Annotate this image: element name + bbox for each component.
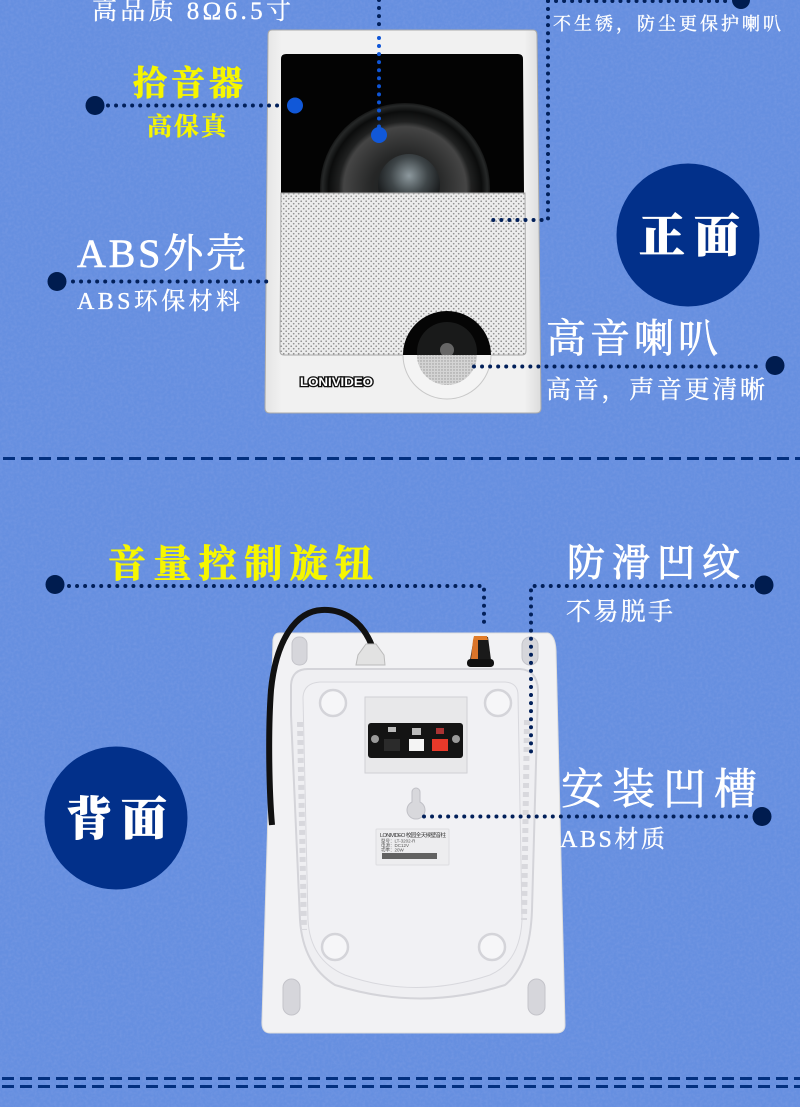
callout: ABS shell bbox=[48, 231, 270, 315]
callout: volume knob: 音量控制旋钮 bbox=[108, 544, 373, 586]
speaker black window bbox=[281, 54, 524, 193]
callout: tweeter: 高音喇叭 bbox=[546, 316, 718, 361]
callout: tweeter: 高音，声音更清晰 bbox=[546, 376, 765, 404]
badge: front bbox=[616, 164, 760, 306]
callout: anti-slip grooves bbox=[531, 543, 774, 757]
rear shell bbox=[262, 633, 565, 1033]
front speaker photo bbox=[265, 30, 541, 413]
callout: microphone: 高保真 bbox=[147, 112, 229, 141]
speaker leader line bbox=[377, 0, 381, 30]
side ribs bbox=[300, 720, 527, 930]
volume knob bbox=[467, 636, 494, 667]
brand logo: LONIVIDEO bbox=[300, 375, 373, 389]
screw bosses bbox=[320, 690, 511, 960]
callout: grille bbox=[490, 0, 781, 220]
callout: mounting groove: 安装凹槽 bbox=[561, 767, 757, 814]
keyhole bbox=[407, 788, 425, 819]
callout: speaker spec (top) bbox=[92, 0, 387, 143]
callout: microphone: 拾音器 bbox=[133, 65, 243, 103]
product label: 型号：LT-3202-R bbox=[381, 838, 416, 844]
callout: mounting groove: ABS材质 bbox=[560, 826, 665, 853]
tweeter recess bbox=[403, 311, 491, 355]
product label: 电源：DC12V bbox=[381, 842, 409, 849]
product label: 功率：20W bbox=[381, 846, 405, 854]
speaker grille bbox=[280, 193, 526, 355]
woofer bbox=[320, 103, 490, 192]
power cable bbox=[269, 610, 372, 825]
badge: back bbox=[44, 746, 188, 890]
callout: mounting groove bbox=[424, 767, 772, 853]
callout: anti-slip grooves: 不易脱手 bbox=[566, 598, 673, 626]
tweeter ring bbox=[402, 355, 492, 400]
badge: front: 正面 bbox=[639, 211, 740, 262]
rear speaker photo bbox=[262, 610, 565, 1033]
speaker terminal bbox=[368, 723, 463, 758]
callout: anti-slip grooves: 防滑凹纹 bbox=[567, 543, 740, 585]
terminal recess bbox=[365, 697, 467, 773]
callout: tweeter bbox=[474, 316, 784, 404]
badge: back: 背面 bbox=[66, 794, 167, 845]
cable grommet bbox=[356, 644, 385, 665]
callout: ABS shell: ABS环保材料 bbox=[77, 288, 240, 315]
callout: ABS shell: ABS外壳 bbox=[77, 231, 246, 276]
raised panel bbox=[291, 669, 538, 998]
mounting slots bbox=[283, 637, 545, 1015]
product label bbox=[376, 829, 449, 865]
callout: microphone bbox=[86, 65, 303, 141]
product label: LONIVIDEO 校园全天候壁音柱 bbox=[380, 831, 446, 839]
divider bbox=[3, 457, 800, 460]
callout: volume knob bbox=[46, 544, 484, 627]
callout: grille: 不生锈，防尘更保护喇叭 bbox=[553, 14, 781, 34]
bottom double divider bbox=[2, 1078, 800, 1086]
